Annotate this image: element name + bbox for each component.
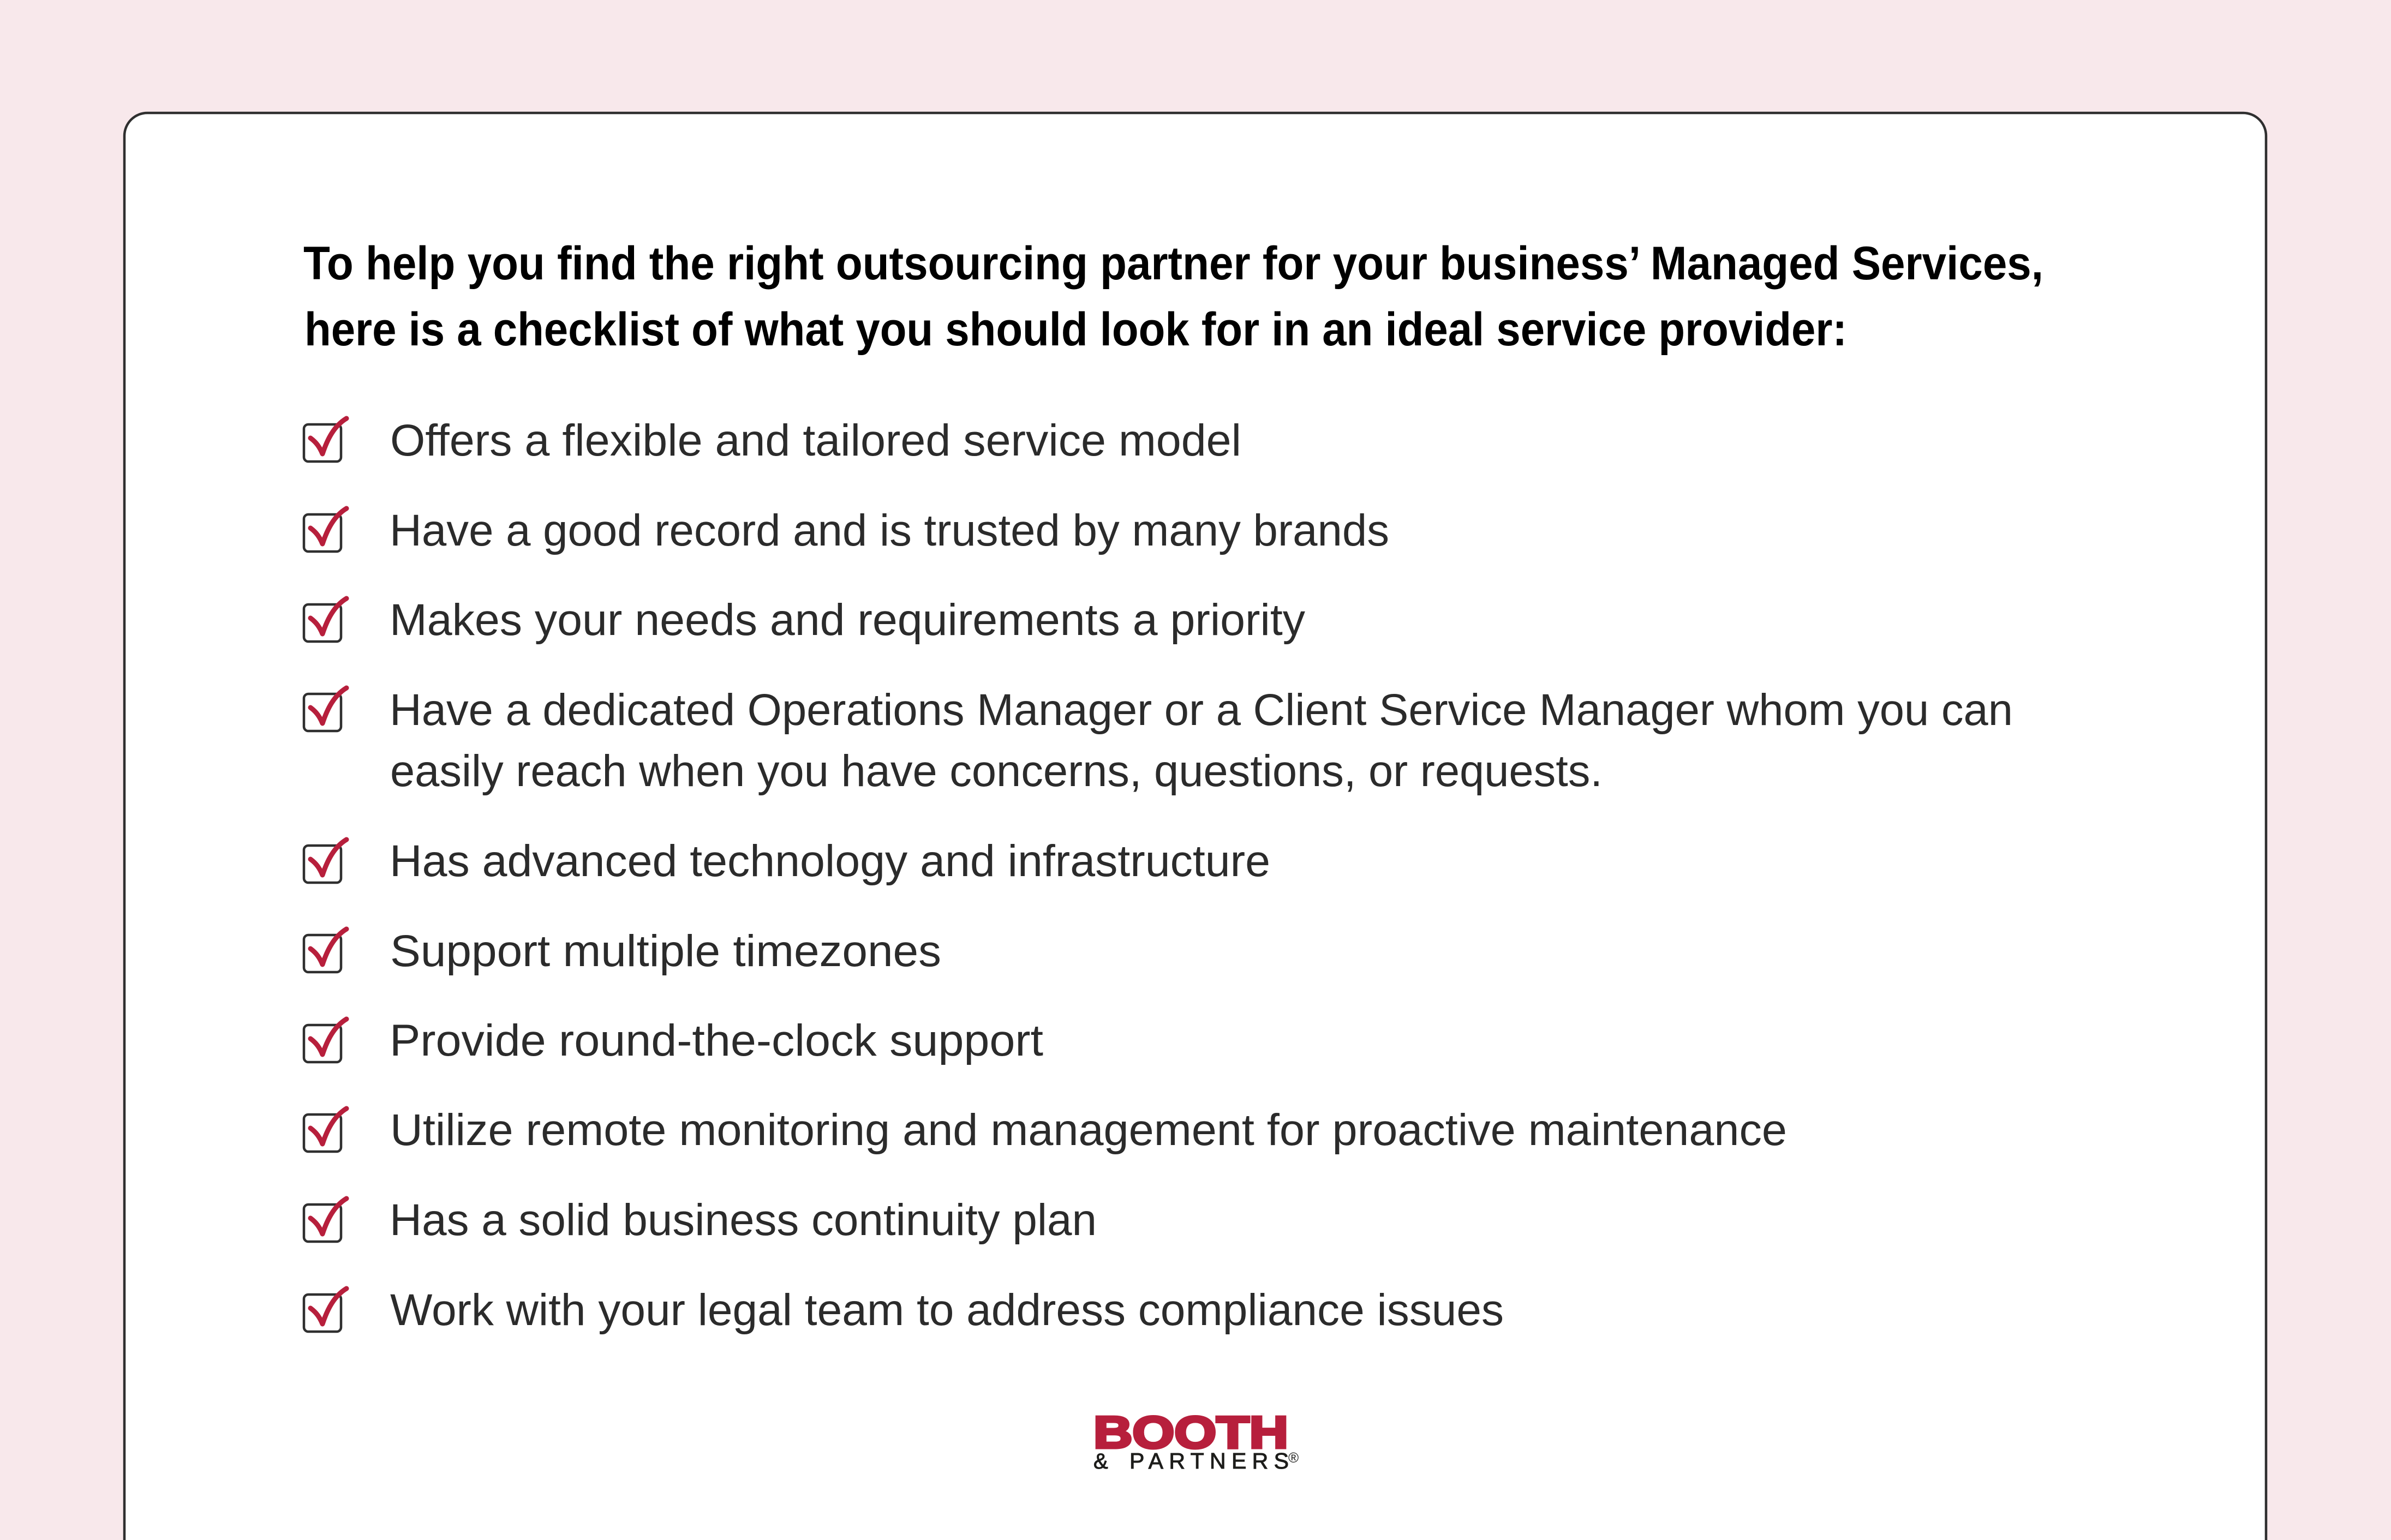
text: item 4 [390,685,2013,796]
icon: checkbox 1 [304,418,346,462]
checklist item 7 [304,1016,1043,1065]
checklist item 2 [304,506,1389,555]
text: item 3: Makes your needs and requirements a priority [390,595,1305,645]
text: item 8: Utilize remote monitoring and management for proactive maintenance [390,1105,1787,1155]
icon: checkbox 10 [304,1289,346,1332]
icon: checkbox 3 [304,598,346,642]
text: item 9: Has a solid business continuity plan [390,1195,1097,1245]
checklist item 8 [304,1105,1787,1155]
icon: checkbox 5 [304,840,346,883]
icon: checkbox 2 [304,508,346,552]
text: item 2: Have a good record and is trusted by many brands [390,506,1389,555]
text: item 7: Provide round-the-clock support [390,1016,1043,1065]
checklist item 9 [304,1195,1097,1245]
icon: checkbox 9 [304,1199,346,1242]
text: item 4: Have a dedicated Operations Manager or a Client Service Manager whom you can [390,685,2013,735]
logo: Booth & Partners: BOOTH [1093,1407,1288,1458]
icon: checkbox 7 [304,1019,346,1062]
logo: Booth & Partners [1093,1407,1299,1473]
text: item 10: Work with your legal team to address compliance issues [390,1285,1504,1335]
checklist item 4 [304,685,2013,796]
icon: checkbox 8 [304,1108,346,1152]
checklist item 10 [304,1285,1504,1335]
checklist item 1 [304,416,1241,465]
icon: checkbox 6 [304,929,346,972]
text: item 1: Offers a flexible and tailored service model [390,416,1241,465]
logo: Booth & Partners: & [1093,1449,1108,1473]
heading [303,237,2043,356]
heading: here is a checklist of what you should look for in an ideal service provider: [304,303,1847,356]
text: item 4: easily reach when you have concerns, questions, or requests. [390,746,1603,796]
checklist item 5 [304,836,1270,886]
logo: Booth & Partners: PARTNERS [1129,1448,1289,1473]
heading: To help you find the right outsourcing partner for your business’ Managed Services, [303,237,2043,290]
logo: Booth & Partners: ® [1288,1449,1299,1466]
checklist item 6 [304,926,941,976]
text: item 6: Support multiple timezones [390,926,941,976]
checklist item 3 [304,595,1305,645]
text: item 5: Has advanced technology and infrastructure [390,836,1270,886]
icon: checkbox 4 [304,688,346,731]
